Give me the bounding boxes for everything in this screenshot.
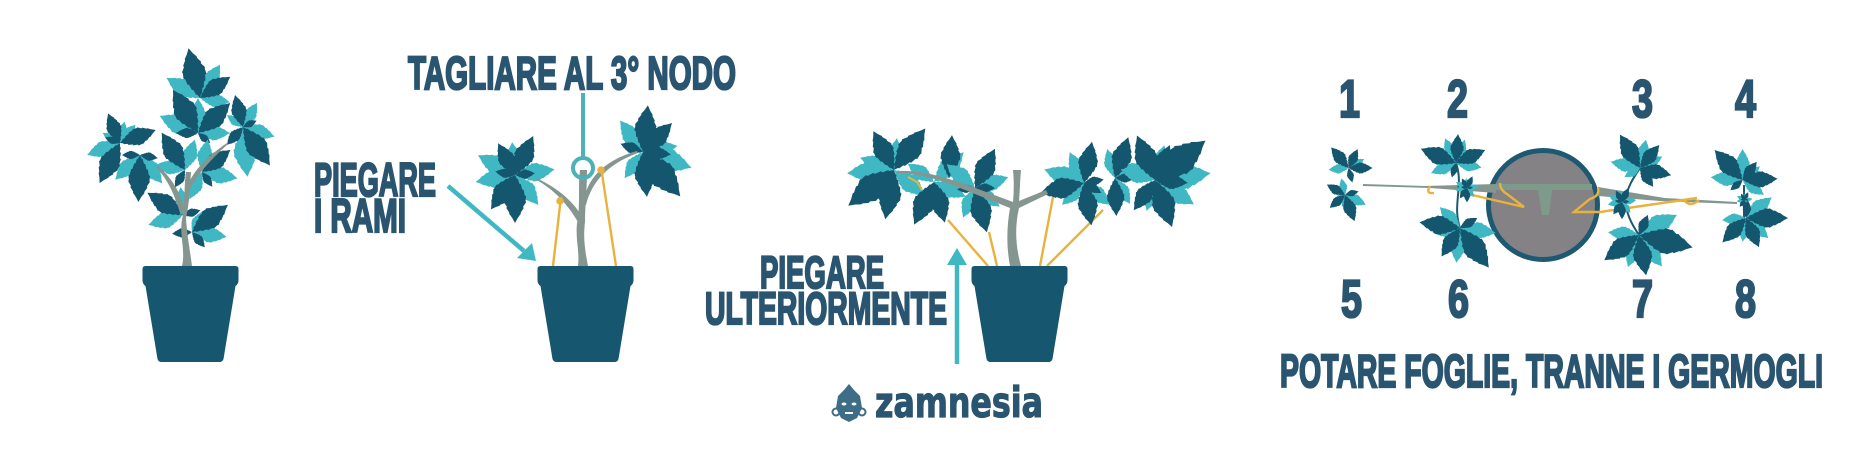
arrow: towards plant 2 [448,186,536,261]
leaves: plant 3 foliage [840,121,1214,235]
leaves: cluster 4 [1708,144,1778,200]
pot: plant 1 [142,266,238,362]
numbers: branch tips: 2 [1447,70,1468,129]
pot: plant 3 [972,266,1068,362]
label: bend the branches: PIEGARE [314,153,436,206]
stem: plant 3 [898,170,1048,266]
leaves: plant 2 right cluster [613,104,695,205]
label: bend further: ULTERIORMENTE [705,283,947,334]
leaves: cluster 3 [1609,130,1673,190]
leaves: cluster 5 [1324,178,1368,224]
leaves: small shoot right [1607,186,1637,219]
leaves: cluster 2 [1417,134,1488,179]
label: bend the branches: I RAMI [314,189,406,242]
label: bend further: PIEGARE [760,247,884,298]
panel: plant 1, untouched plant in pot [84,46,279,362]
ties: top-view yellow strings [1428,183,1699,212]
leaves: small shoot far right [1736,191,1753,210]
leaves: plant 1 foliage [84,46,279,250]
logo: zamnesia [832,378,1043,427]
numbers: branch tips: 1 [1339,70,1360,129]
leaves: small shoot left [1455,175,1479,202]
numbers: branch tips [1339,70,1756,329]
pot seen from above [1488,150,1598,260]
ties: yellow strings [553,167,616,266]
stem: top-view horizontal branches [1363,163,1744,235]
panel: plant 3, bent further [840,121,1214,362]
wordmark: zamnesia [875,378,1043,427]
panel: plant 4, top view [1324,130,1788,277]
panel: plant 2, topped and tied [473,93,695,362]
icon: mask emblem [832,384,866,422]
leaves: cluster 8 [1717,191,1788,250]
label: bend further [705,247,947,334]
numbers: branch tips: 4 [1735,70,1756,129]
leaves: cluster 1 [1326,143,1372,183]
heading: cut at third node: TAGLIARE AL 3° NODO [408,47,736,99]
stem: plant 2 [535,151,638,266]
numbers: branch tips: 3 [1632,70,1653,129]
numbers: branch tips: 5 [1341,270,1362,329]
leaves: plant 2 left cluster [473,132,556,223]
callout: cut marker line and ring [573,93,593,178]
arrow: upward to plant 3 [947,248,967,364]
stem: plant 1 trunk and branches [156,143,228,266]
numbers: branch tips: 8 [1735,270,1756,329]
leaves: cluster 7 [1598,206,1695,277]
ties: plant 3 strings [948,197,1103,266]
tie: plant 3 small hook [908,177,922,190]
numbers: branch tips: 6 [1448,270,1469,329]
leaves: cluster 6 [1418,203,1498,274]
numbers: branch tips: 7 [1632,270,1653,329]
pot: plant 2 [538,266,634,362]
label: bend the branches [314,153,436,242]
